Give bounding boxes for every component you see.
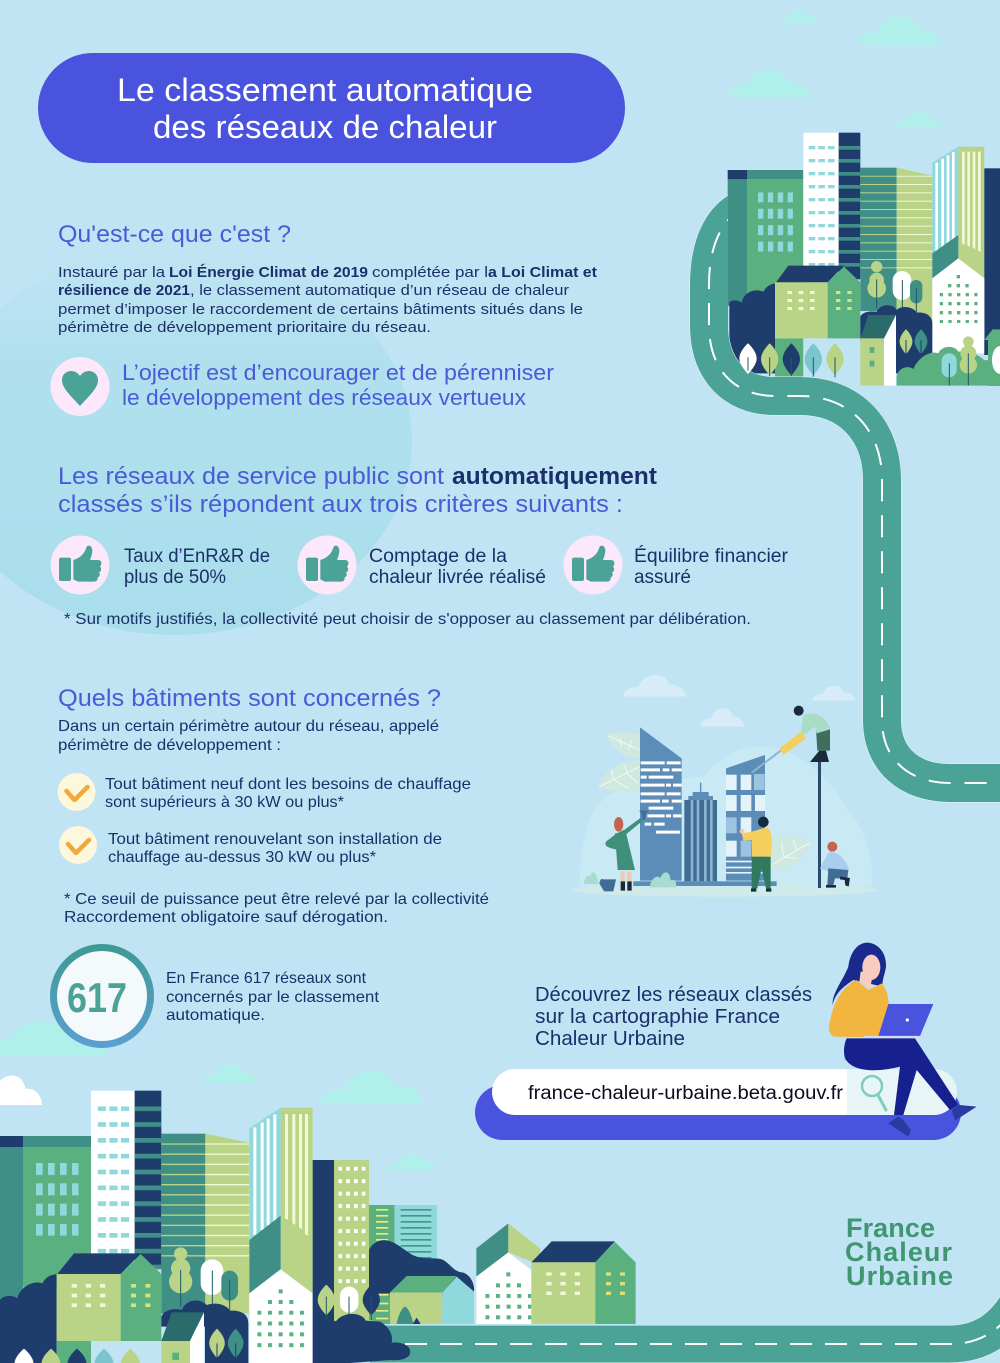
intro paragraph: périmètre de développement prioritaire du réseau.: [58, 319, 431, 336]
trees along the road: [739, 343, 844, 377]
buildings intro: périmètre de développement :: [58, 737, 281, 754]
logo: [845, 1213, 953, 1291]
url search bar: [475, 1069, 961, 1140]
icon: heart: [50, 357, 110, 416]
title pill: [38, 53, 625, 163]
stat text: concernés par le classement: [166, 989, 380, 1006]
illustration: city bottom centre: [313, 1160, 636, 1363]
heading: what is it: Qu'est-ce que c'est ?: [58, 221, 291, 248]
stat: 617: [54, 948, 150, 1044]
intro paragraph: [58, 264, 597, 336]
criterion 3: Équilibre financier: [634, 546, 789, 567]
url search bar: france-chaleur-urbaine.beta.gouv.fr: [528, 1083, 844, 1104]
intro paragraph: permet d’imposer le raccordement de certains bâtiments situés dans le: [58, 301, 583, 318]
heading: criteria: automatiquement: [452, 463, 657, 490]
title pill: Le classement automatique: [117, 72, 533, 108]
intro paragraph: a Loi Climat et: [488, 264, 597, 281]
logo: Urbaine: [846, 1261, 953, 1291]
logo: Chaleur: [845, 1237, 952, 1267]
criterion 2: Comptage de la: [369, 546, 507, 567]
objective statement: le développement des réseaux vertueux: [122, 385, 526, 410]
road: bottom: [370, 1308, 1000, 1344]
right edge of top city: [988, 340, 1000, 386]
list item 2: Tout bâtiment renouvelant son installation de: [108, 831, 442, 848]
criterion 2: chaleur livrée réalisé: [369, 567, 546, 588]
stat text: automatique.: [166, 1007, 265, 1024]
heading: buildings: Quels bâtiments sont concernés ?: [58, 685, 441, 712]
clouds top right: [728, 10, 942, 127]
white cloud: [0, 1075, 42, 1105]
background blob: [0, 245, 412, 635]
map call to action: sur la cartographie France: [535, 1006, 780, 1028]
intro paragraph: , le classement automatique d’un réseau de chaleur: [190, 282, 569, 299]
map call to action: Découvrez les réseaux classés: [535, 984, 812, 1006]
criterion 3: [564, 536, 789, 594]
illustration: woman with laptop: [829, 943, 977, 1137]
list item 1: [58, 773, 471, 811]
list item 1: Tout bâtiment neuf dont les besoins de chauffage: [105, 776, 471, 793]
title pill: des réseaux de chaleur: [153, 109, 497, 145]
criterion 1: plus de 50%: [124, 567, 226, 588]
footnote: threshold: Raccordement obligatoire sauf dérogation.: [64, 909, 388, 926]
criterion 2: [298, 536, 546, 594]
criterion 3: assuré: [634, 567, 691, 588]
logo: France: [846, 1213, 935, 1243]
list item 2: [59, 826, 442, 866]
icon: magnifier: [862, 1076, 886, 1110]
criterion 1: Taux d’EnR&R de: [124, 546, 270, 567]
intro paragraph: Loi Énergie Climat de 2019: [169, 264, 368, 281]
objective statement: L’ojectif est d’encourager et de pérenniser: [122, 360, 554, 385]
stat text: [166, 970, 380, 1024]
clouds bottom left: [0, 1021, 437, 1170]
heading: criteria: [58, 463, 657, 518]
footnote: opposition: * Sur motifs justifiés, la collectivité peut choisir de s'opposer au classement par délibération.: [64, 611, 751, 628]
buildings intro: Dans un certain périmètre autour du réseau, appelé: [58, 718, 439, 735]
stat text: En France 617 réseaux sont: [166, 970, 367, 987]
map call to action: Chaleur Urbaine: [535, 1028, 685, 1050]
illustration: city bottom left: [0, 1091, 313, 1363]
objective statement: [122, 360, 554, 410]
illustration: people building a city: [572, 675, 878, 897]
list item 1: sont supérieurs à 30 kW ou plus*: [105, 794, 344, 811]
road: main winding: [709, 208, 1000, 783]
buildings intro: [58, 718, 439, 754]
intro paragraph: complétée par l: [372, 264, 488, 281]
footnote: threshold: [64, 891, 489, 926]
stat: 617: 617: [67, 974, 127, 1021]
intro paragraph: Instauré par la: [58, 264, 166, 281]
criterion 1: [50, 536, 270, 594]
illustration: city top right: [728, 133, 1000, 386]
footnote: threshold: * Ce seuil de puissance peut être relevé par la collectivité: [64, 891, 489, 908]
map call to action: [535, 984, 812, 1050]
list item 2: chauffage au-dessus 30 kW ou plus*: [108, 849, 376, 866]
heading: criteria: Les réseaux de service public sont: [58, 463, 444, 490]
intro paragraph: résilience de 2021: [58, 282, 190, 299]
heading: criteria: classés s’ils répondent aux trois critères suivants :: [58, 491, 623, 518]
